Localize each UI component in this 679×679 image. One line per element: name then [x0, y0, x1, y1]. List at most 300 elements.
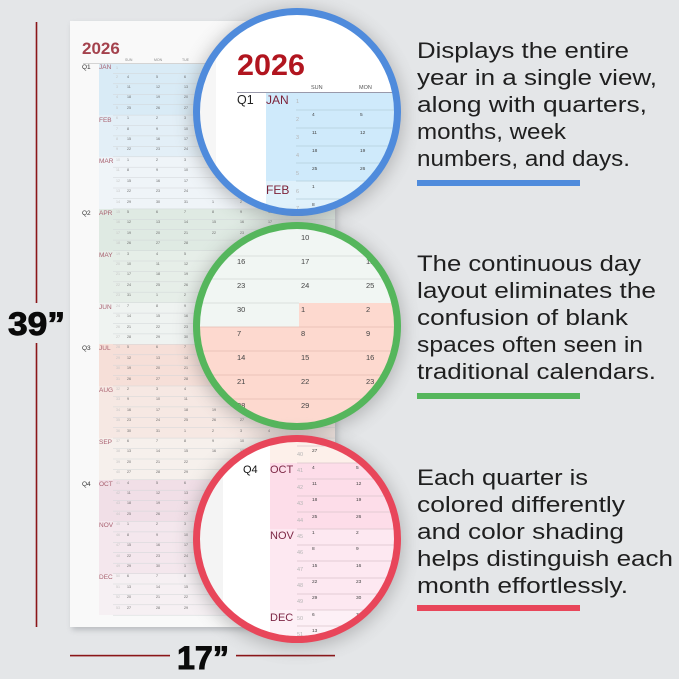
text block: single view — [417, 38, 657, 171]
day numbers and week numbers: 28 — [184, 241, 188, 245]
text block: continuous layout: confusion of blank — [417, 305, 629, 330]
day numbers and week numbers: 15 — [127, 137, 131, 141]
day numbers and week numbers: 2 — [156, 116, 158, 120]
day numbers and week numbers: 23 — [184, 325, 188, 329]
day numbers and week numbers: 12 — [156, 491, 160, 495]
day numbers and week numbers: 28 — [116, 345, 120, 349]
day numbers and week numbers: 9 — [156, 533, 158, 537]
zoomed dates: 30 — [356, 595, 362, 601]
day numbers and week numbers: 14 — [127, 314, 131, 318]
day numbers and week numbers: 5 — [116, 106, 118, 110]
day numbers and week numbers: 2 — [116, 75, 118, 79]
day numbers and week numbers: 10 — [268, 210, 272, 214]
day numbers and week numbers: 24 — [127, 283, 131, 287]
day numbers and week numbers: 10 — [240, 439, 244, 443]
zoomed dates: 7 — [356, 612, 359, 618]
day numbers and week numbers: 29 — [184, 606, 188, 610]
zoomed dates: 25 — [366, 281, 374, 290]
day numbers and week numbers: 9 — [212, 439, 214, 443]
day numbers and week numbers: 4 — [184, 387, 186, 391]
text block: continuous layout — [417, 251, 656, 384]
day numbers and week numbers: 16 — [240, 220, 244, 224]
weekday header: TUE — [182, 58, 190, 62]
day numbers and week numbers: 34 — [116, 408, 120, 412]
text block: quarter colours: helps distinguish each — [417, 546, 673, 571]
day numbers and week numbers: 4 — [116, 95, 118, 99]
zoomed dates: 16 — [366, 353, 374, 362]
zoomed quarter and months: FEB — [266, 183, 289, 197]
day numbers and week numbers: 23 — [116, 293, 120, 297]
day numbers and week numbers: 8 — [184, 574, 186, 578]
day numbers and week numbers: 17 — [184, 137, 188, 141]
underline: red — [417, 605, 580, 611]
zoomed dates: 2 — [356, 530, 359, 536]
zoomed week numbers: 1 — [296, 99, 299, 105]
height dimension: 39 inches: 39” — [8, 306, 65, 342]
day numbers and week numbers: 4 — [127, 481, 129, 485]
zoomed dates: 28 — [237, 401, 245, 410]
day numbers and week numbers: 16 — [212, 449, 216, 453]
day numbers and week numbers: 6 — [116, 116, 118, 120]
day numbers and week numbers: 1 — [127, 158, 129, 162]
day numbers and week numbers: 20 — [184, 95, 188, 99]
day numbers and week numbers: 15 — [127, 543, 131, 547]
day numbers and week numbers: 10 — [184, 127, 188, 131]
day numbers and week numbers: 24 — [116, 304, 120, 308]
day numbers and week numbers: 15 — [156, 314, 160, 318]
day numbers and week numbers: 2 — [156, 522, 158, 526]
day numbers and week numbers: 5 — [127, 345, 129, 349]
day numbers and week numbers: 23 — [156, 189, 160, 193]
zoomed dates: 22 — [301, 377, 309, 386]
day numbers and week numbers: 48 — [116, 554, 120, 558]
zoomed weekday labels — [311, 85, 372, 89]
day numbers and week numbers: 3 — [156, 387, 158, 391]
day numbers and week numbers: 7 — [156, 439, 158, 443]
magnifier: Q4 colour shading — [190, 430, 410, 648]
text block: continuous layout: spaces often seen in — [417, 332, 643, 357]
day numbers and week numbers: 36 — [116, 429, 120, 433]
day numbers and week numbers: 38 — [116, 449, 120, 453]
day numbers and week numbers: 15 — [184, 449, 188, 453]
day numbers and week numbers: 12 — [127, 220, 131, 224]
day numbers and week numbers: 26 — [127, 377, 131, 381]
zoomed week numbers: 4 — [296, 153, 299, 159]
zoomed dates: 12 — [360, 130, 366, 136]
day numbers and week numbers: 49 — [116, 564, 120, 568]
day numbers and week numbers: 32 — [116, 387, 120, 391]
day numbers and week numbers: 45 — [116, 522, 120, 526]
zoomed week numbers: 47 — [297, 567, 303, 573]
day numbers and week numbers: 9 — [156, 127, 158, 131]
zoomed dates: 29 — [312, 595, 318, 601]
month labels — [99, 64, 114, 581]
day numbers and week numbers: 20 — [127, 460, 131, 464]
text block: quarter colours: Each quarter is — [417, 465, 588, 490]
day numbers and week numbers: 1 — [116, 66, 118, 70]
month labels: APR — [99, 210, 113, 217]
width dimension: 17 inches: 17” — [177, 640, 229, 676]
day numbers and week numbers: 39 — [116, 460, 120, 464]
month colour bands — [99, 64, 335, 615]
day numbers and week numbers: 28 — [268, 418, 272, 422]
day numbers and week numbers: 19 — [156, 501, 160, 505]
zoomed year heading: 2026 — [237, 49, 305, 82]
day numbers and week numbers: 27 — [127, 470, 131, 474]
zoomed weekday labels: SUN — [311, 85, 323, 91]
day numbers and week numbers: 18 — [116, 241, 120, 245]
day numbers and week numbers: 21 — [116, 272, 120, 276]
zoomed week numbers: 50 — [297, 616, 303, 622]
zoomed week numbers: 40 — [297, 452, 303, 458]
zoomed dates: 22 — [312, 579, 318, 585]
day numbers and week numbers: 1 — [127, 116, 129, 120]
day numbers and week numbers: 42 — [116, 491, 120, 495]
day numbers and week numbers: 2 — [156, 158, 158, 162]
day numbers and week numbers: 11 — [268, 439, 272, 443]
day numbers and week numbers: 24 — [268, 231, 272, 235]
day numbers and week numbers: 19 — [212, 408, 216, 412]
quarter labels: Q4 — [82, 481, 91, 488]
underline: green — [417, 393, 580, 399]
zoomed dates: 19 — [356, 497, 362, 503]
day numbers and week numbers: 30 — [156, 200, 160, 204]
day numbers and week numbers: 10 — [156, 397, 160, 401]
day numbers and week numbers: 51 — [116, 585, 120, 589]
zoomed dates: 25 — [312, 166, 318, 172]
day numbers and week numbers: 8 — [212, 210, 214, 214]
day numbers and week numbers: 31 — [156, 429, 160, 433]
day numbers and week numbers: 4 — [156, 252, 158, 256]
day numbers and week numbers: 20 — [240, 408, 244, 412]
magnifier: continuous day layout — [190, 223, 410, 435]
zoomed week numbers: 51 — [297, 632, 303, 638]
day numbers and week numbers: 28 — [127, 335, 131, 339]
day numbers and week numbers: 15 — [116, 210, 120, 214]
day numbers and week numbers: 25 — [127, 512, 131, 516]
day numbers and week numbers: 6 — [156, 345, 158, 349]
zoomed week numbers: 42 — [297, 485, 303, 491]
calendar year heading: 2026 — [82, 39, 120, 58]
day numbers and week numbers: 19 — [116, 252, 120, 256]
day numbers and week numbers: 22 — [184, 460, 188, 464]
zoomed dates: 16 — [237, 257, 245, 266]
zoomed week numbers: 43 — [297, 501, 303, 507]
day numbers and week numbers: 3 — [184, 158, 186, 162]
day numbers and week numbers: 8 — [127, 533, 129, 537]
day numbers and week numbers: 30 — [116, 366, 120, 370]
day numbers and week numbers: 1 — [184, 429, 186, 433]
day numbers and week numbers: 5 — [156, 75, 158, 79]
day numbers and week numbers: 37 — [116, 439, 120, 443]
day numbers and week numbers: 29 — [156, 335, 160, 339]
day numbers and week numbers: 25 — [184, 418, 188, 422]
zoomed week numbers: 2 — [296, 117, 299, 123]
day numbers and week numbers: 22 — [184, 595, 188, 599]
zoomed dates: 9 — [366, 329, 370, 338]
text block: quarter colours: colored differently — [417, 492, 625, 517]
day numbers and week numbers: 12 — [184, 262, 188, 266]
zoomed dates: 2 — [360, 184, 363, 190]
day numbers and week numbers: 19 — [184, 272, 188, 276]
day numbers and week numbers: 17 — [184, 543, 188, 547]
zoomed dates: 18 — [312, 497, 318, 503]
zoomed dates: 12 — [356, 481, 362, 487]
day numbers and week numbers: 30 — [184, 335, 188, 339]
zoomed week numbers: 6 — [296, 189, 299, 195]
day numbers and week numbers: 29 — [127, 564, 131, 568]
day numbers and week numbers: 47 — [116, 543, 120, 547]
day numbers and week numbers: 5 — [156, 481, 158, 485]
text block: quarter colours: month effortlessly. — [417, 573, 628, 598]
height dimension: 39 inches — [6, 22, 68, 627]
day numbers and week numbers: 23 — [127, 418, 131, 422]
underline: blue — [417, 180, 580, 186]
day numbers and week numbers: 22 — [212, 231, 216, 235]
day numbers and week numbers: 29 — [127, 200, 131, 204]
day numbers and week numbers: 31 — [184, 200, 188, 204]
day numbers and week numbers: 17 — [156, 408, 160, 412]
day numbers and week numbers: 26 — [212, 418, 216, 422]
zoomed dates — [237, 233, 374, 410]
text block: quarter colours — [417, 465, 673, 598]
weekday header: MON — [154, 58, 163, 62]
day numbers and week numbers: 31 — [116, 377, 120, 381]
day numbers and week numbers: 26 — [184, 283, 188, 287]
day numbers and week numbers: 43 — [116, 501, 120, 505]
day numbers and week numbers: 27 — [156, 377, 160, 381]
day numbers and week numbers: 21 — [184, 366, 188, 370]
day numbers and week numbers: 9 — [127, 397, 129, 401]
zoomed dates: 27 — [312, 448, 318, 454]
day numbers and week numbers: 27 — [240, 418, 244, 422]
zoomed dates: 8 — [312, 546, 315, 552]
text block: single view: year in a single view, — [417, 65, 657, 90]
text block: continuous layout: traditional calendars. — [417, 359, 656, 384]
day numbers and week numbers: 3 — [184, 116, 186, 120]
day numbers and week numbers: 40 — [116, 470, 120, 474]
day numbers and week numbers: 10 — [184, 533, 188, 537]
day numbers and week numbers: 20 — [116, 262, 120, 266]
zoomed dates: 1 — [312, 184, 315, 190]
day numbers and week numbers: 13 — [156, 220, 160, 224]
day numbers and week numbers: 18 — [156, 272, 160, 276]
day numbers and week numbers: 27 — [184, 512, 188, 516]
day numbers and week numbers: 18 — [127, 501, 131, 505]
zoomed weekday labels: MON — [359, 85, 372, 91]
day numbers and week numbers: 41 — [116, 481, 120, 485]
day numbers and week numbers: 6 — [184, 75, 186, 79]
day numbers and week numbers: 15 — [184, 585, 188, 589]
day numbers and week numbers: 13 — [184, 85, 188, 89]
day numbers and week numbers: 16 — [156, 137, 160, 141]
day numbers and week numbers: 11 — [184, 397, 188, 401]
zoomed quarter and months — [243, 464, 294, 624]
zoomed dates: 29 — [301, 401, 309, 410]
text block: continuous layout: The continuous day — [417, 251, 641, 276]
text block: quarter colours: and color shading — [417, 519, 624, 544]
day numbers and week numbers: 21 — [156, 595, 160, 599]
zoomed dates: 8 — [301, 329, 305, 338]
zoomed week numbers: 44 — [297, 518, 303, 524]
day numbers and week numbers: 3 — [268, 200, 270, 204]
zoomed dates: 23 — [356, 579, 362, 585]
day numbers and week numbers: 16 — [127, 408, 131, 412]
day numbers and week numbers: 23 — [156, 147, 160, 151]
zoomed quarter and months: NOV — [270, 530, 294, 542]
quarter labels: Q2 — [82, 210, 91, 217]
day numbers and week numbers: 6 — [127, 439, 129, 443]
day numbers and week numbers: 18 — [184, 408, 188, 412]
day numbers and week numbers: 16 — [116, 220, 120, 224]
zoomed dates: 4 — [312, 112, 315, 118]
day numbers and week numbers: 22 — [156, 325, 160, 329]
zoomed dates: 21 — [237, 377, 245, 386]
zoomed dates: 5 — [360, 112, 363, 118]
day numbers and week numbers: 21 — [268, 408, 272, 412]
day numbers and week numbers: 21 — [127, 325, 131, 329]
day numbers and week numbers: 9 — [156, 168, 158, 172]
day numbers and week numbers: 14 — [156, 449, 160, 453]
zoomed dates: 1 — [312, 530, 315, 536]
zoomed dates: 23 — [366, 377, 374, 386]
zoomed dates: 25 — [312, 514, 318, 520]
zoomed dates: 9 — [360, 202, 363, 208]
day numbers and week numbers: 13 — [127, 585, 131, 589]
day numbers and week numbers: 6 — [127, 574, 129, 578]
zoomed dates: 14 — [237, 353, 245, 362]
quarter labels — [82, 64, 91, 488]
month labels: JUN — [99, 304, 112, 311]
day numbers and week numbers: 33 — [116, 397, 120, 401]
day numbers and week numbers: 8 — [156, 304, 158, 308]
zoomed dates: 4 — [312, 465, 315, 471]
text block: single view: along with quarters, — [417, 92, 647, 117]
zoomed dates: 26 — [356, 514, 362, 520]
zoomed quarter and months: JAN — [266, 93, 289, 107]
day numbers and week numbers: 1 — [127, 522, 129, 526]
day numbers and week numbers: 11 — [156, 262, 160, 266]
zoomed quarter and months: Q4 — [243, 464, 258, 476]
day numbers and week numbers: 28 — [184, 377, 188, 381]
day numbers and week numbers: 50 — [116, 574, 120, 578]
day numbers and week numbers: 4 — [127, 75, 129, 79]
day numbers and week numbers: 12 — [127, 356, 131, 360]
zoomed dates: 23 — [237, 281, 245, 290]
day numbers and week numbers: 22 — [127, 189, 131, 193]
zoomed dates: 9 — [356, 546, 359, 552]
zoomed dates: 18 — [366, 257, 374, 266]
zoomed week numbers: 48 — [297, 583, 303, 589]
day numbers and week numbers: 14 — [156, 585, 160, 589]
day numbers and week numbers: 13 — [116, 189, 120, 193]
day numbers and week numbers: 1 — [156, 293, 158, 297]
day numbers and week numbers: 14 — [184, 220, 188, 224]
day numbers and week numbers: 26 — [116, 325, 120, 329]
zoomed quarter and months: OCT — [270, 464, 294, 476]
month labels: NOV — [99, 522, 114, 529]
day numbers and week numbers: 11 — [127, 85, 131, 89]
day numbers and week numbers: 46 — [116, 533, 120, 537]
day numbers and week numbers: 16 — [156, 179, 160, 183]
day numbers and week numbers: 7 — [184, 210, 186, 214]
text block: continuous layout: layout eliminates the — [417, 278, 656, 303]
zoomed week numbers: 7 — [296, 206, 299, 212]
day numbers and week numbers: 16 — [184, 314, 188, 318]
month labels: MAR — [99, 158, 114, 165]
day numbers and week numbers: 13 — [184, 491, 188, 495]
day numbers and week numbers: 7 — [156, 574, 158, 578]
day numbers and week numbers: 20 — [184, 501, 188, 505]
day numbers and week numbers: 9 — [116, 147, 118, 151]
day numbers and week numbers: 4 — [268, 429, 270, 433]
zoomed dates: 18 — [312, 148, 318, 154]
day numbers and week numbers: 7 — [184, 345, 186, 349]
zoomed dates: 5 — [356, 465, 359, 471]
zoomed week numbers: 45 — [297, 534, 303, 540]
day numbers and week numbers: 22 — [127, 554, 131, 558]
week separators — [113, 73, 335, 615]
day numbers and week numbers: 10 — [127, 262, 131, 266]
day numbers and week numbers: 53 — [116, 606, 120, 610]
day numbers and week numbers: 8 — [116, 137, 118, 141]
zoomed dates: 6 — [312, 612, 315, 618]
month labels: JAN — [99, 64, 112, 71]
day numbers and week numbers: 2 — [212, 429, 214, 433]
day numbers and week numbers: 28 — [156, 470, 160, 474]
day numbers and week numbers: 5 — [127, 210, 129, 214]
day numbers and week numbers: 13 — [127, 449, 131, 453]
day numbers and week numbers: 3 — [116, 85, 118, 89]
month labels: AUG — [99, 387, 113, 394]
weekday header — [83, 58, 335, 64]
day numbers and week numbers: 26 — [156, 512, 160, 516]
zoomed dates — [312, 112, 366, 208]
magnifier: year and quarter header — [190, 0, 406, 221]
month labels: SEP — [99, 439, 112, 446]
day numbers and week numbers: 11 — [127, 491, 131, 495]
weekday header: SUN — [125, 58, 133, 62]
day numbers and week numbers: 19 — [127, 366, 131, 370]
day numbers and week numbers: 8 — [127, 168, 129, 172]
day numbers and week numbers: 19 — [156, 95, 160, 99]
zoomed dates: 2 — [366, 305, 370, 314]
zoomed dates: 8 — [312, 202, 315, 208]
day numbers and week numbers: 1 — [212, 200, 214, 204]
day numbers and week numbers: 2 — [240, 200, 242, 204]
day numbers and week numbers: 17 — [240, 449, 244, 453]
day numbers and week numbers: 29 — [184, 470, 188, 474]
day numbers and week numbers: 12 — [116, 179, 120, 183]
day numbers and week numbers: 16 — [156, 543, 160, 547]
day numbers and week numbers: 15 — [127, 179, 131, 183]
day numbers and week numbers: 28 — [156, 606, 160, 610]
zoomed dates: 11 — [312, 130, 317, 136]
day numbers and week numbers: 15 — [212, 220, 216, 224]
text block: single view: Displays the entire — [417, 38, 629, 63]
day numbers and week numbers: 7 — [116, 127, 118, 131]
day numbers and week numbers: 17 — [127, 272, 131, 276]
day numbers and week numbers: 10 — [116, 158, 120, 162]
day numbers and week numbers: 27 — [127, 606, 131, 610]
day numbers and week numbers: 12 — [156, 85, 160, 89]
month labels: MAY — [99, 252, 113, 259]
quarter labels: Q3 — [82, 345, 91, 352]
zoomed dates: 10 — [301, 233, 309, 242]
day numbers and week numbers: 14 — [184, 356, 188, 360]
day numbers and week numbers: 3 — [240, 429, 242, 433]
day numbers and week numbers: 21 — [156, 460, 160, 464]
